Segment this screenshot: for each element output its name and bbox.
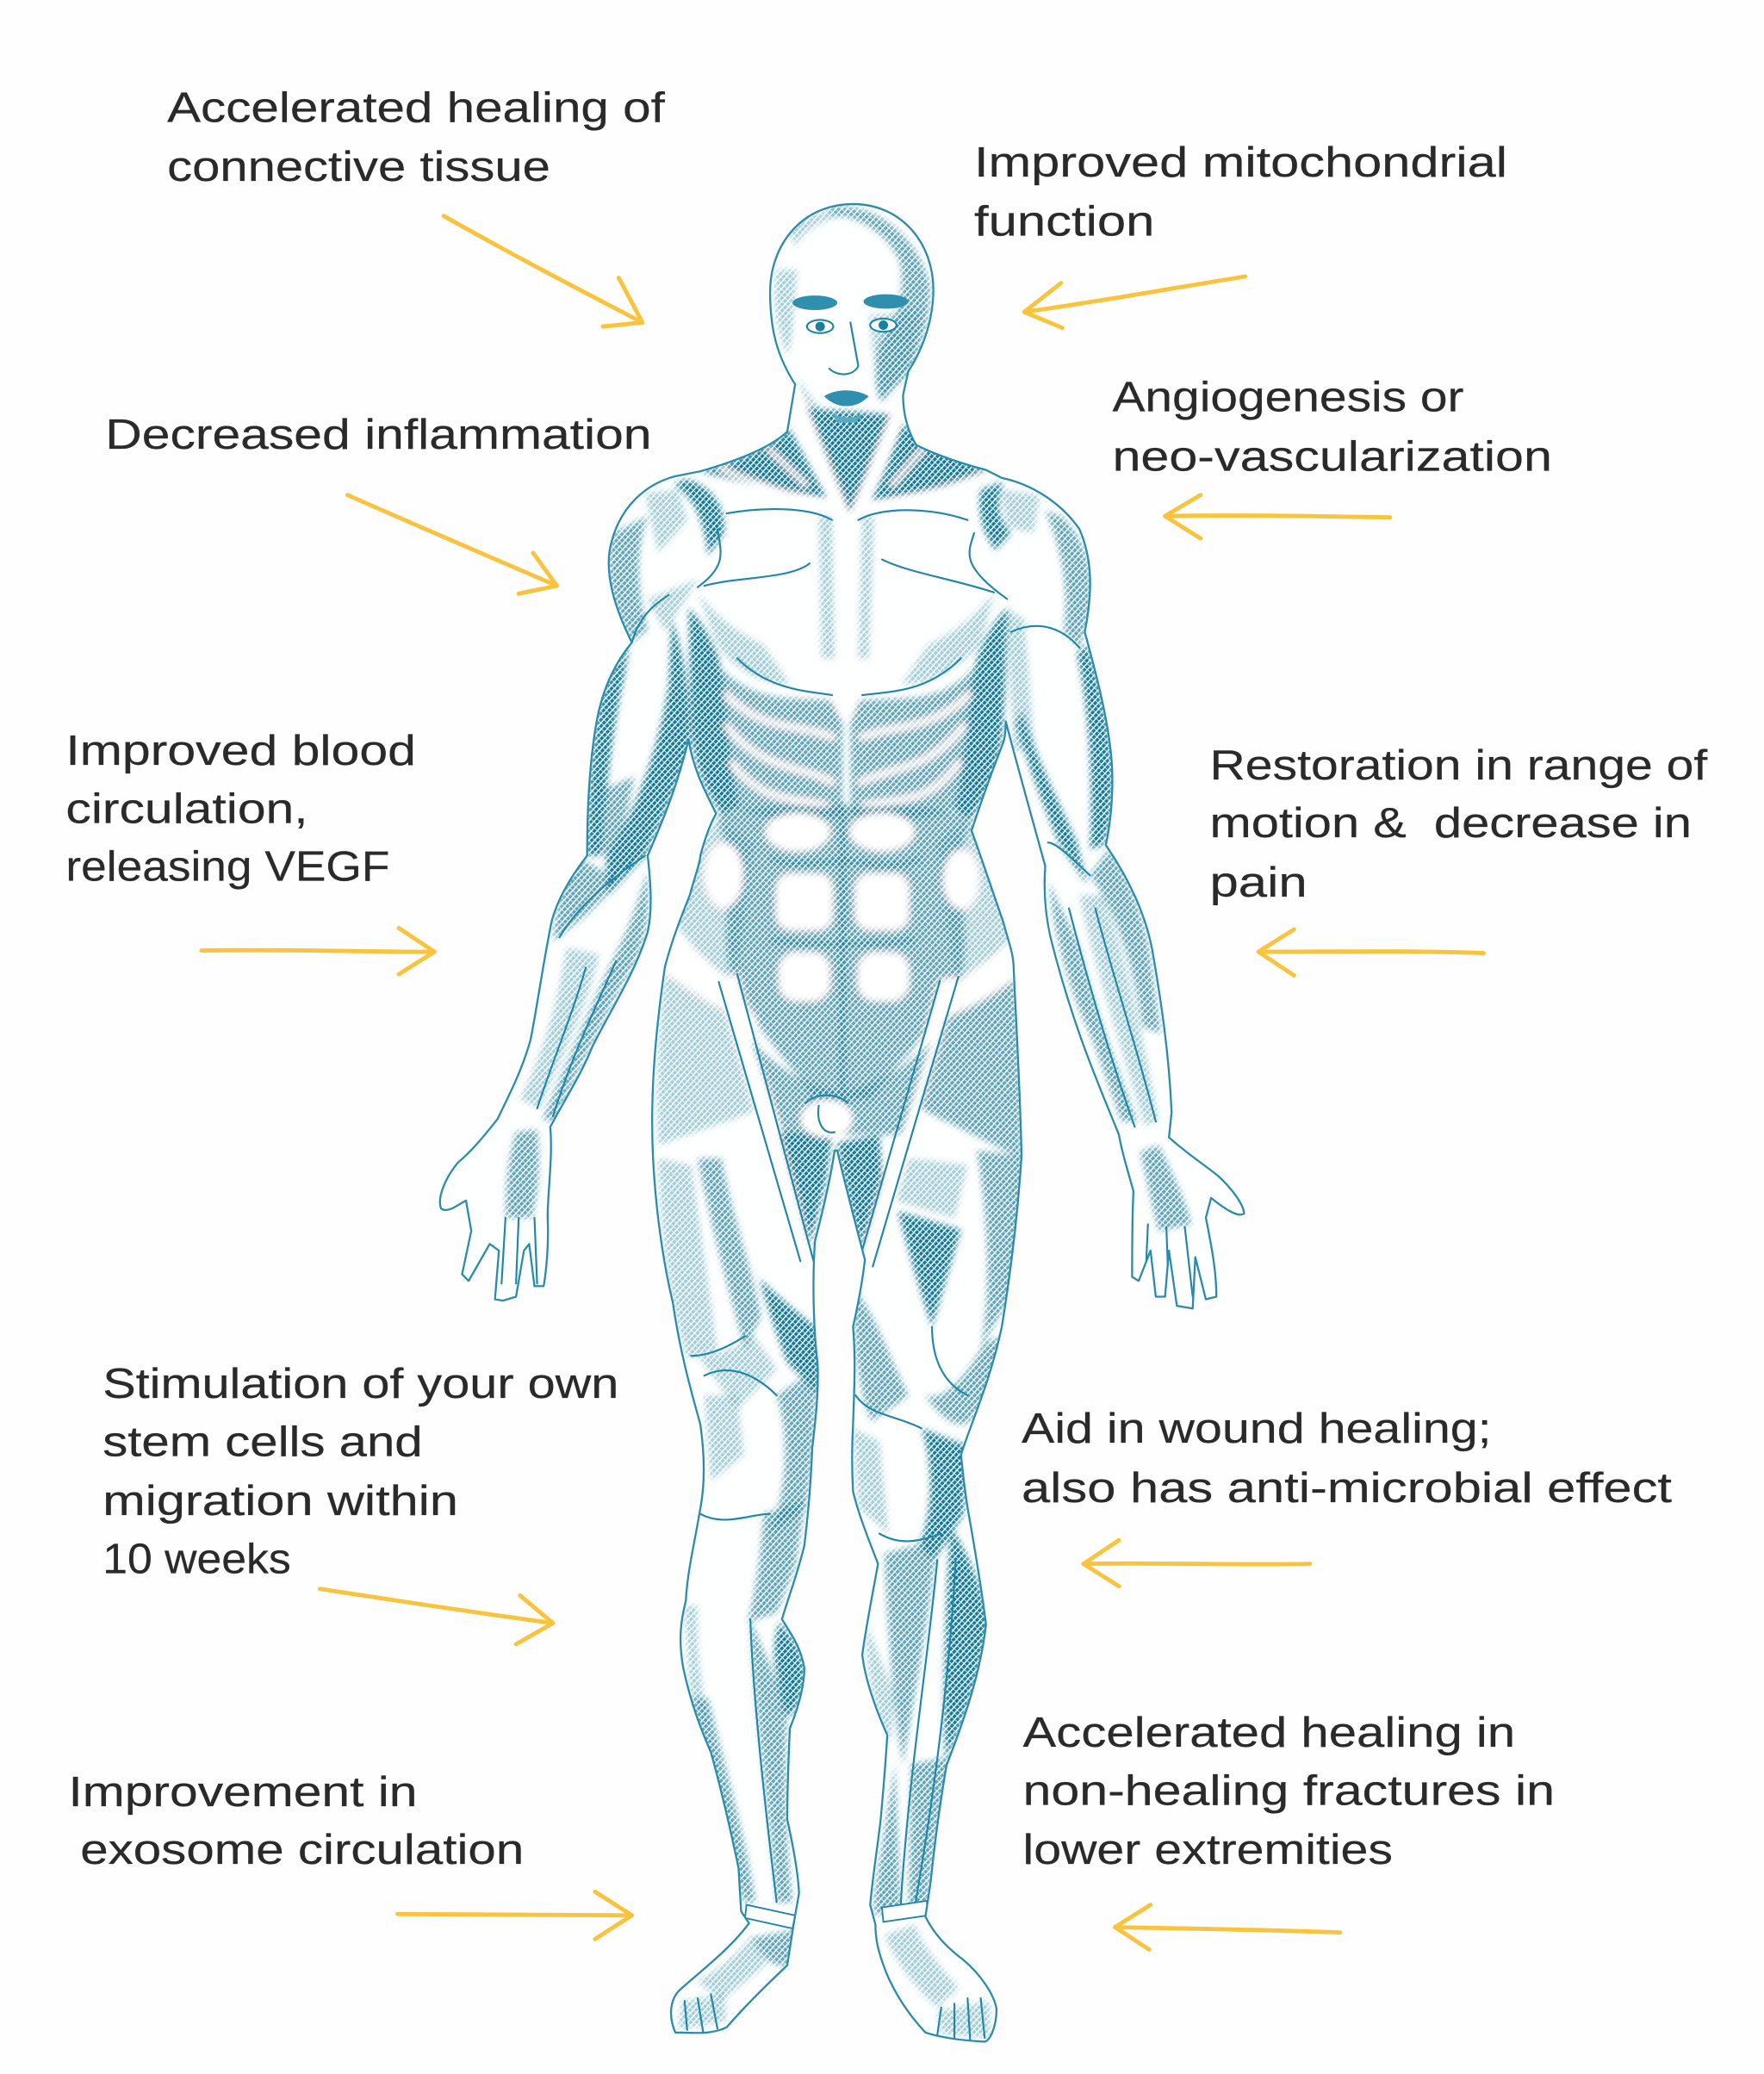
text: stimulation of stem cells: stem cells and — [102, 1419, 423, 1465]
text: angiogenesis — [1112, 375, 1552, 480]
arrow: mitochondrial function — [1024, 276, 1245, 328]
anatomical figure — [439, 203, 1245, 2043]
figure outline — [440, 204, 1244, 2042]
shading: right leg — [837, 977, 1024, 1916]
text: restoration in range of motion: pain — [1210, 860, 1307, 906]
text: stimulation of stem cells — [102, 1361, 618, 1582]
arrow: stem cells — [320, 1589, 553, 1644]
muscle contour lines — [501, 509, 1193, 2040]
arrow: fractures — [1115, 1905, 1340, 1950]
text: stimulation of stem cells: Stimulation of your own — [102, 1361, 618, 1407]
shading: neck and trapezius — [700, 403, 990, 513]
text: decreased inflammation: Decreased inflammation — [105, 412, 652, 458]
text: accelerated healing in fractures: non-healing fractures in — [1023, 1767, 1555, 1814]
text: aid in wound healing: also has anti-microbial effect — [1022, 1465, 1673, 1512]
text: exosome circulation: exosome circulation — [80, 1827, 524, 1873]
arrow: connective tissue — [444, 216, 643, 326]
text: improved blood circulation — [65, 728, 416, 891]
arrow: wound healing — [1084, 1540, 1310, 1587]
text: accelerated healing of connective tissue — [167, 84, 665, 190]
text: improved blood circulation: releasing VEGF — [65, 844, 389, 891]
shading: chest and ribs — [688, 516, 1007, 819]
text: stimulation of stem cells: 10 weeks — [102, 1536, 291, 1582]
text: exosome circulation: Improvement in — [68, 1769, 417, 1816]
text: improved blood circulation: circulation, — [65, 786, 308, 832]
text: restoration in range of motion — [1210, 742, 1708, 906]
arrow: decreased inflammation — [347, 495, 556, 593]
text: stimulation of stem cells: migration within — [102, 1478, 458, 1524]
text: restoration in range of motion: motion & decrease in — [1210, 800, 1692, 847]
shading: groin — [750, 1040, 932, 1138]
shading: hands and feet — [506, 1129, 1191, 2038]
arrow: range of motion — [1258, 929, 1483, 976]
text: aid in wound healing — [1022, 1406, 1673, 1512]
engraved shading — [500, 205, 1196, 2040]
text: accelerated healing in fractures: lower extremities — [1023, 1827, 1393, 1873]
text: accelerated healing in fractures: Accelerated healing in — [1023, 1710, 1515, 1756]
figure silhouette — [440, 204, 1244, 2042]
text: improved mitochondrial function: Improved mitochondrial — [974, 140, 1507, 186]
shading: shoulders and arms — [520, 479, 1161, 1127]
text: accelerated healing in fractures — [1023, 1710, 1555, 1873]
text: improved mitochondrial function: function — [974, 199, 1154, 245]
shading: head — [774, 207, 930, 434]
text: restoration in range of motion: Restoration in range of — [1210, 742, 1708, 789]
text: accelerated healing of connective tissue: Accelerated healing of — [167, 84, 665, 131]
arrow: angiogenesis — [1165, 495, 1390, 538]
text: improved mitochondrial function — [974, 140, 1507, 245]
engraving hatch overlay — [500, 205, 1196, 2040]
text: angiogenesis: Angiogenesis or — [1112, 375, 1464, 421]
text: exosome circulation — [68, 1769, 524, 1873]
text: aid in wound healing: Aid in wound healing; — [1022, 1406, 1492, 1452]
text: improved blood circulation: Improved blood — [65, 728, 416, 774]
shading: abdomen — [657, 803, 1022, 1158]
arrow: exosome circulation — [398, 1891, 632, 1939]
arrow: blood circulation — [202, 928, 434, 974]
shading: left leg — [658, 974, 832, 1903]
text: angiogenesis: neo-vascularization — [1112, 433, 1552, 480]
face features — [792, 295, 909, 423]
text: accelerated healing of connective tissue: connective tissue — [167, 144, 550, 190]
